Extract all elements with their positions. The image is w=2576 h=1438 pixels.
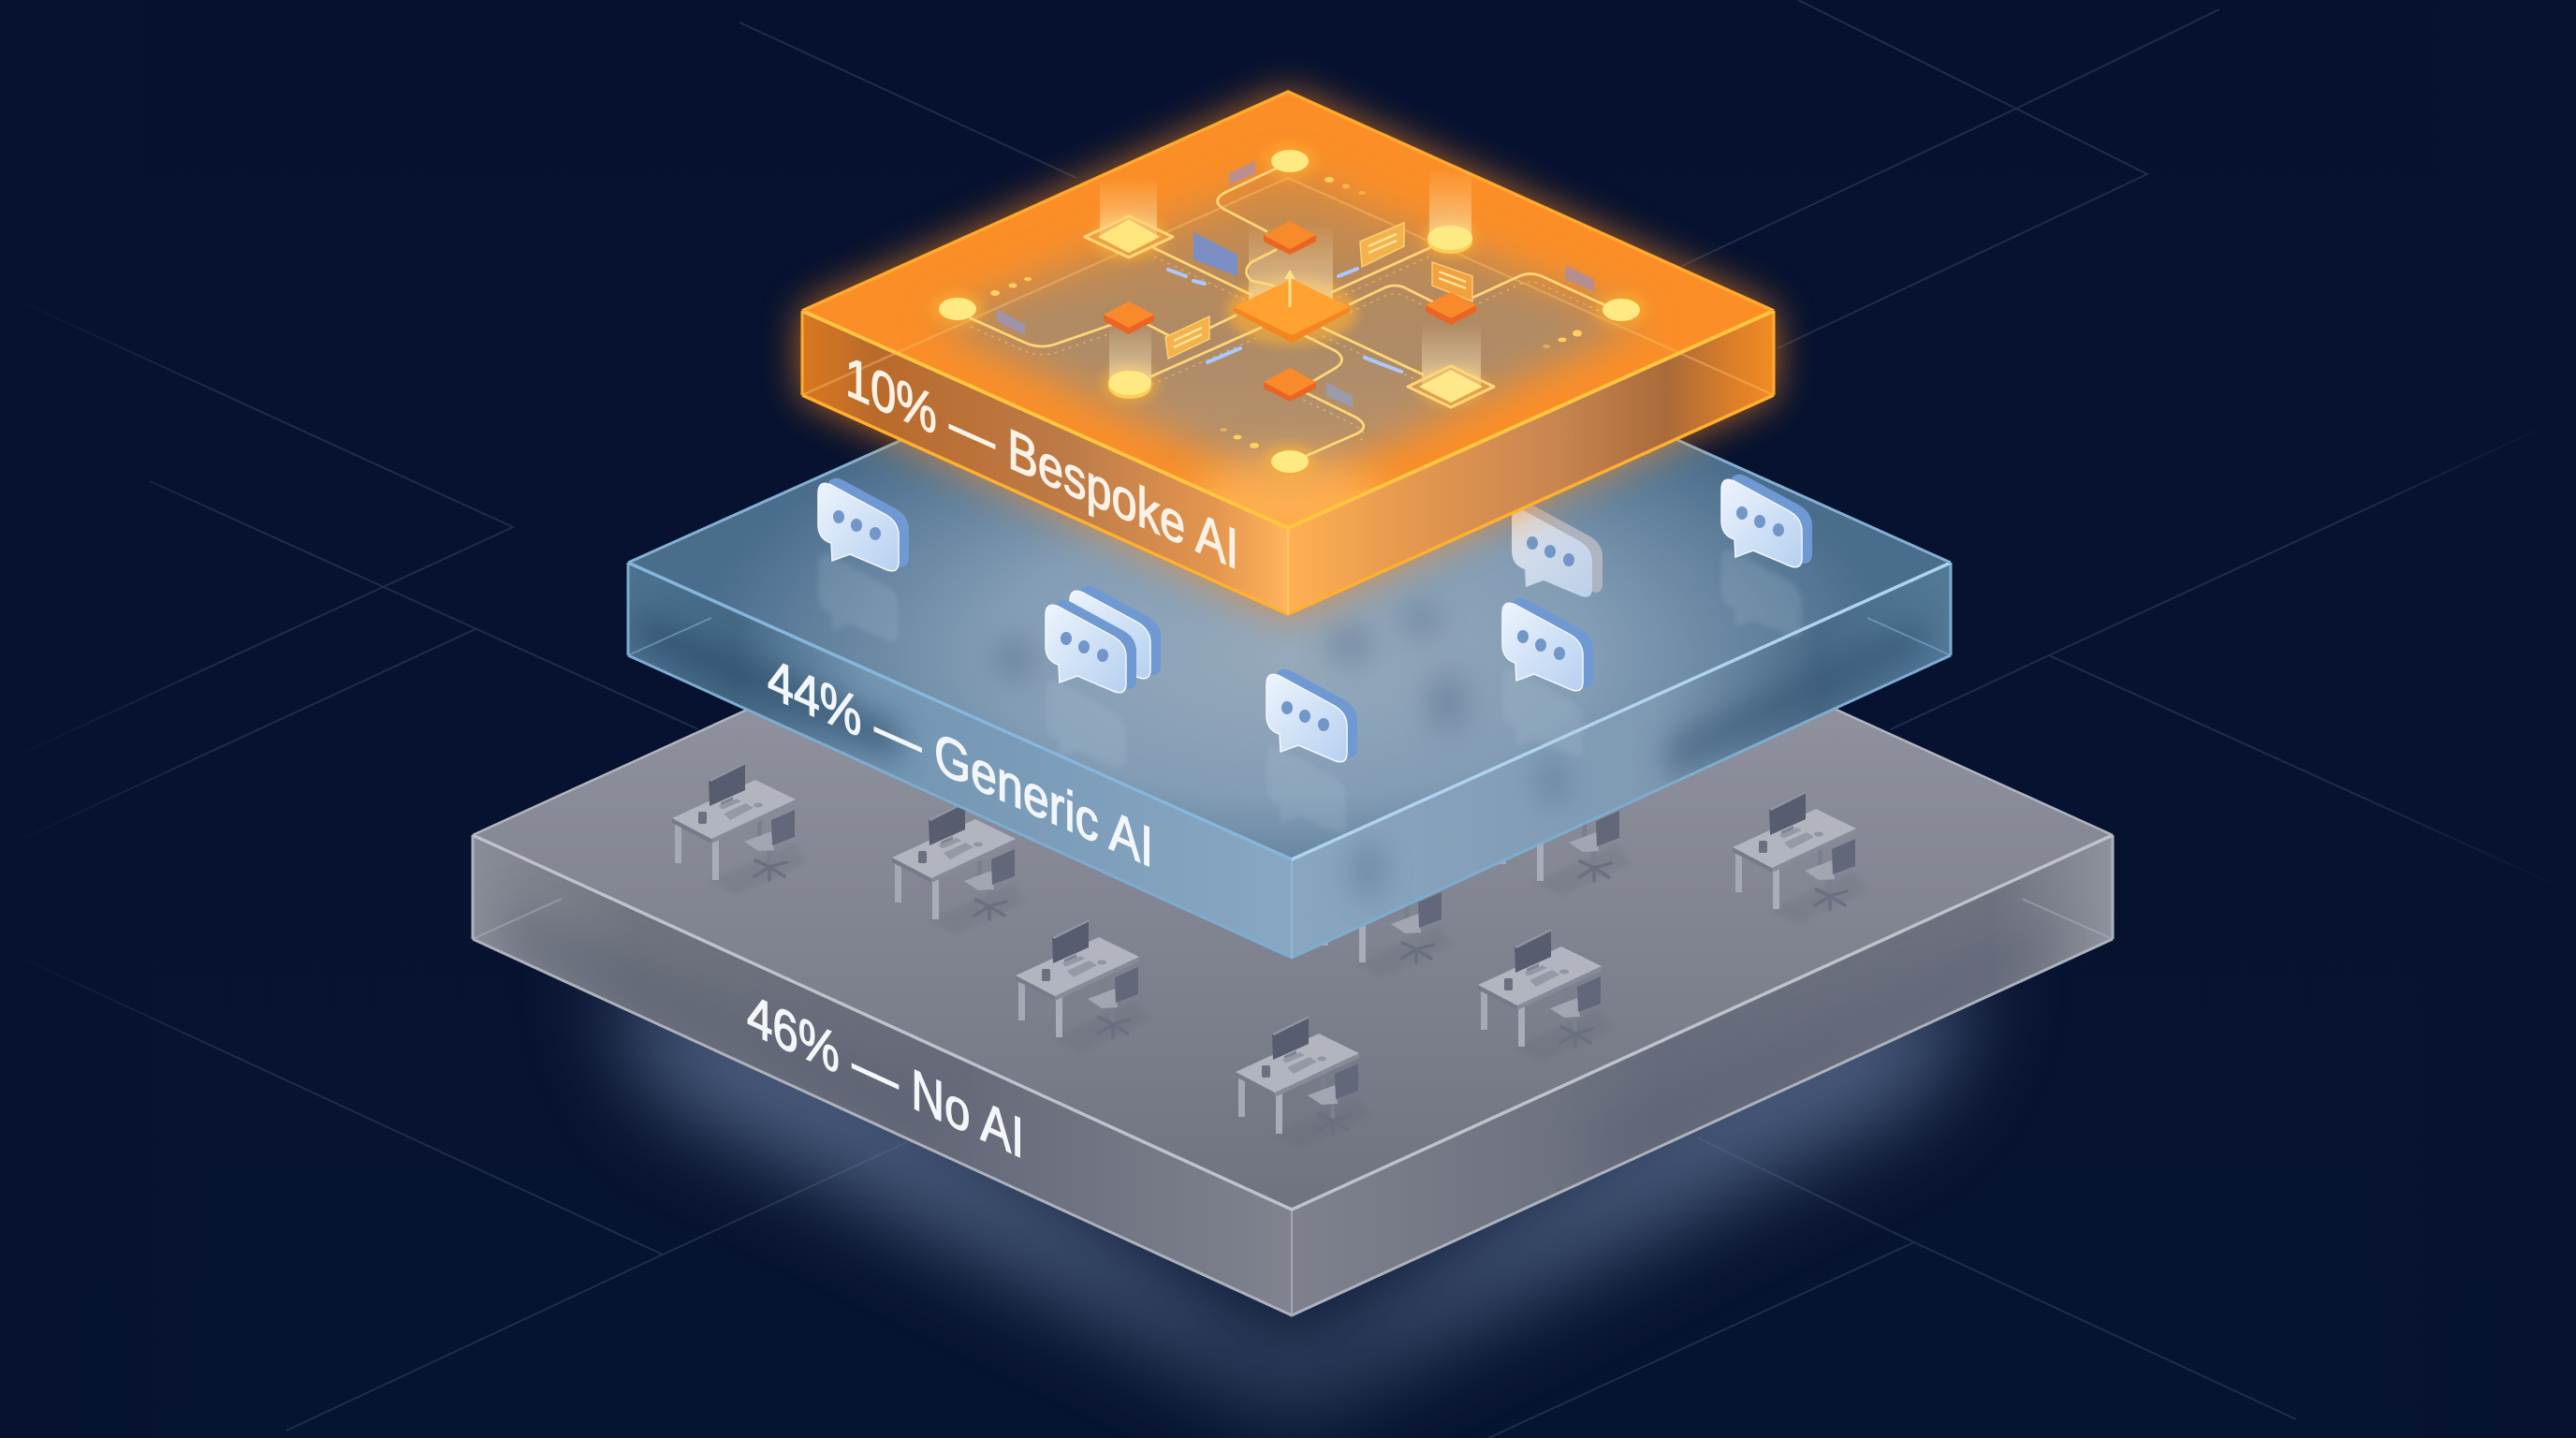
blue slab top face [628,266,1951,859]
orange slab right side face [1288,311,1774,614]
label: 46% No AI: 46% — No AI [747,982,1024,1171]
glowing node halos [931,144,1647,478]
blue glow lines [1168,269,1401,372]
square pads [1085,216,1494,407]
icon: desk 4 [1497,763,1632,896]
grey slab left side face [473,835,1292,1315]
icon: chat bubble 5 [1502,598,1593,691]
circuit traces [971,169,1607,457]
small dot groups [990,177,1582,448]
light beams [1100,169,1481,387]
grey slab top face [473,462,2113,1210]
icon: desk 2 [892,801,1027,934]
icon: double chat bubble 4 [1046,586,1161,693]
grey slab right side face [1292,835,2113,1315]
glowing nodes [939,150,1640,473]
circuit diagram on orange slab [931,144,1647,478]
orange slab left side face [802,311,1288,614]
yellow note cards [1165,223,1472,359]
label: 44% Generic AI: 44% — Generic AI [768,646,1153,881]
icon: desk 6 [1319,844,1454,977]
layer: No AI (grey slab) [472,709,2114,1317]
icon: chat bubble 1 [818,478,909,571]
frosted shadows through glass [993,603,1568,899]
icon: desk 1 [672,762,807,895]
icon: chat bubble 3 [1721,475,1812,567]
label: 10% Bespoke AI: 10% — Bespoke AI [845,345,1238,582]
blue cards [997,161,1594,407]
icon: desk 8 [1236,1016,1370,1149]
layer: Generic AI (blue slab) [627,439,1953,959]
small orange chips [1104,221,1476,402]
icon: chat bubble 2 [1512,505,1603,597]
icon: desk 7 [1478,929,1613,1062]
bubble reflections [818,550,1802,833]
orange glow [802,92,1774,614]
faint dashed secondary traces [971,257,1607,442]
icon: desk 3 [1016,919,1150,1052]
icon: desk 5 [1733,791,1867,924]
blue slab right side face [1292,563,1951,958]
blue slab left side face [628,563,1292,958]
central hub [1234,270,1350,343]
glow under bottom slab [599,964,1984,1404]
layer: Bespoke AI (orange slab) [802,92,1774,614]
icon: chat bubble 6 [1266,669,1357,762]
orange slab top face [802,92,1774,528]
